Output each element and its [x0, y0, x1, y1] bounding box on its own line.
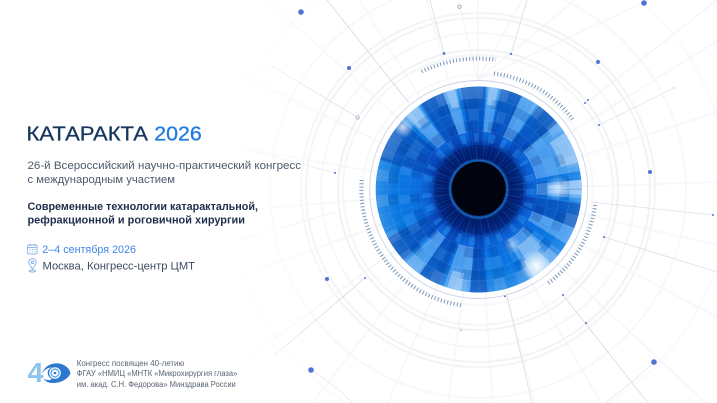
pupil rays — [443, 154, 515, 226]
topic heading — [28, 201, 258, 226]
logo: 40 years: 4 — [28, 357, 44, 388]
mosaic cells — [382, 92, 576, 286]
tick arcs — [361, 59, 595, 306]
footer text: ФГАУ «НМИЦ «МНТК «Микрохирургия глаза» — [77, 369, 238, 378]
left fade over web — [235, 0, 345, 403]
icon: calendar — [28, 244, 37, 254]
subtitle — [28, 160, 302, 186]
subtitle: с международным участием — [28, 174, 175, 186]
icon: location pin — [29, 259, 36, 272]
iris outer ring — [370, 80, 588, 298]
node dots — [298, 0, 714, 373]
pupil — [452, 162, 506, 216]
accent rays — [240, 0, 717, 403]
footer text: Конгресс посвящен 40-летию — [77, 359, 184, 368]
logo: 40 years — [28, 357, 70, 388]
title: 2026 — [154, 122, 202, 146]
topic heading: рефракционной и роговичной хирургии — [28, 214, 245, 226]
glare — [520, 249, 554, 283]
title: КАТАРАКТА — [26, 122, 148, 146]
title — [26, 122, 202, 146]
footer text — [77, 359, 238, 389]
date: 2–4 сентября 2026 — [42, 244, 136, 256]
subtitle: 26-й Всероссийский научно-практический конгресс — [28, 160, 302, 172]
mosaic grid lines — [407, 118, 551, 262]
topic heading: Современные технологии катарактальной, — [28, 201, 258, 213]
pupil glow — [450, 160, 507, 218]
venue: Москва, Конгресс-центр ЦМТ — [42, 260, 195, 272]
footer text: им. акад. С.Н. Федорова» Минздрава России — [77, 380, 236, 389]
eye iris — [376, 86, 582, 292]
radial web — [228, 0, 717, 403]
